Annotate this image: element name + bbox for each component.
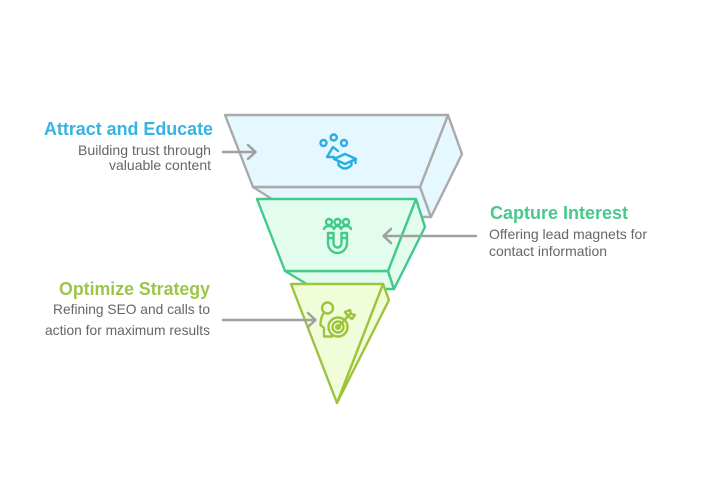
icon: people and graduation cap [320, 134, 356, 168]
icon: magnet and people [324, 219, 351, 253]
text: optimize description: Refining SEO and calls to [53, 301, 210, 317]
text: capture description: contact information [489, 243, 607, 259]
heading: capture interest: Capture Interest [490, 203, 628, 223]
arrow: to tier 2 [384, 229, 476, 243]
funnel tier 2: capture interest [257, 199, 425, 289]
text: capture description: Offering lead magnets for [489, 226, 647, 242]
text: attract description [78, 142, 211, 173]
icon: person with target [320, 302, 355, 336]
text: capture description [489, 226, 647, 259]
text: optimize description [45, 301, 210, 338]
heading: attract and educate: Attract and Educate [44, 119, 213, 139]
heading: optimize strategy: Optimize Strategy [59, 279, 210, 299]
text: optimize description: action for maximum results [45, 322, 210, 338]
text: attract description: Building trust through [78, 142, 211, 158]
funnel tier 1: attract and educate [225, 115, 462, 217]
text: attract description: valuable content [109, 157, 211, 173]
arrow: to tier 3 [223, 313, 316, 327]
arrow: to tier 1 [223, 145, 256, 159]
funnel tier 3: optimize strategy [291, 284, 389, 403]
